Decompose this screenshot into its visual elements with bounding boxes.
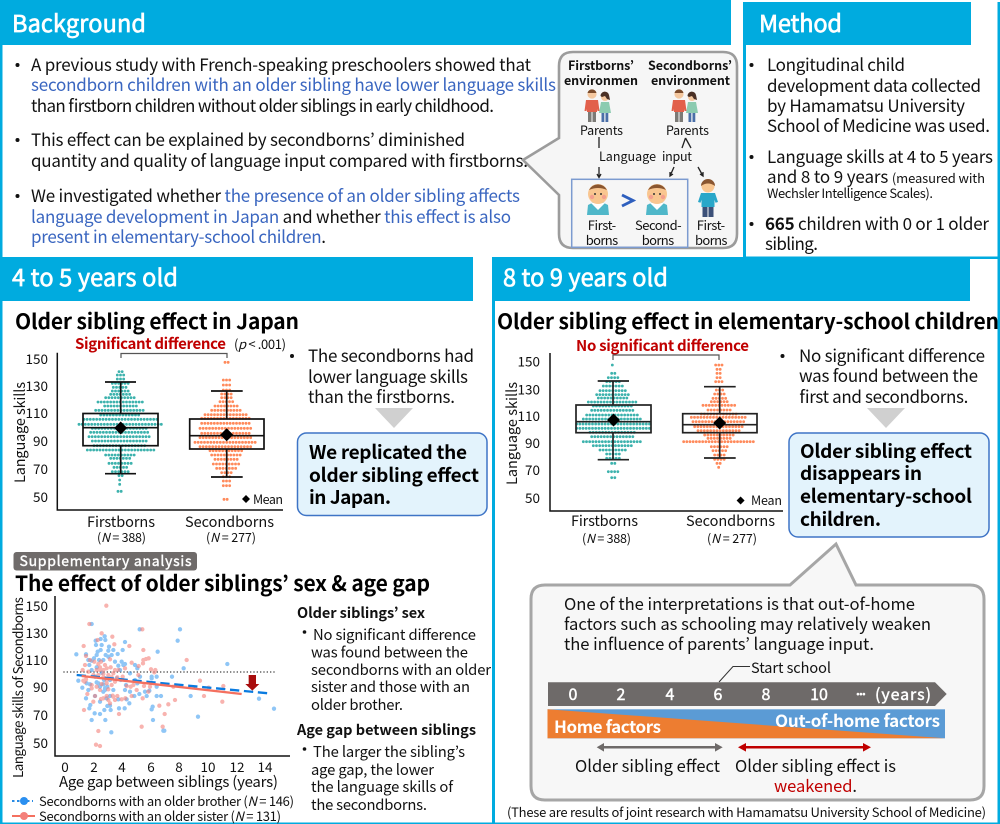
icon: baby secondborn — [646, 184, 668, 215]
text block: older siblings' sex — [297, 602, 491, 715]
diagram child labels: borns — [642, 230, 674, 249]
text block: finding 4 to 5 years — [290, 342, 474, 408]
icon: parents of secondborns — [672, 89, 698, 122]
diagram labels — [564, 55, 732, 165]
significance label: Significant difference — [75, 333, 226, 354]
x axis labels: (N = 277) — [206, 527, 256, 546]
arrow: age timeline: 6 — [714, 681, 723, 705]
arrow: older sibling effect period: Older sibling effect — [575, 753, 720, 777]
callout: conclusion 8 to 9 years — [789, 433, 989, 537]
panel: background — [0, 0, 737, 249]
y axis labels: 50 — [525, 487, 540, 507]
diagram labels: Language — [599, 146, 656, 165]
arrow: weakened period — [735, 743, 896, 797]
x axis labels: 6 — [147, 756, 155, 776]
label: start school: Start school — [751, 657, 831, 678]
text block: method bullets: and 8 to 9 years (measured with — [767, 163, 985, 188]
text block: method bullets: development data collected — [767, 72, 981, 97]
diagram child labels: Second- — [635, 215, 682, 234]
text block: age gap between siblings: Age gap between siblings — [296, 719, 476, 740]
diagram labels: Parents — [666, 120, 709, 139]
y axis labels — [7, 595, 48, 778]
arrow: age timeline: 10 — [810, 681, 828, 705]
diagram labels: Firstborns’ — [568, 55, 634, 74]
significance label: (p < .001) — [234, 334, 286, 353]
x axis labels: 12 — [230, 756, 244, 776]
x axis labels: 14 — [258, 756, 273, 776]
diagram labels: Parents — [580, 120, 623, 139]
text block: interpretation: the influence of parents’ language input. — [564, 631, 874, 655]
heading: background: Background — [12, 5, 146, 39]
text block: finding 4 to 5 years: than the firstborns. — [308, 383, 455, 408]
heading: background — [0, 0, 731, 45]
arrow: age timeline: 8 — [762, 681, 771, 705]
text block: age gap between siblings: the secondborns. — [311, 794, 427, 815]
text block: method bullets: Longitudinal child — [767, 51, 905, 76]
diagram labels: Secondborns’ — [648, 55, 732, 74]
text block: finding 8 to 9 years: No significant difference — [799, 342, 985, 367]
x axis labels: (N = 388) — [97, 527, 146, 546]
arrow: age timeline — [548, 681, 947, 706]
text block: finding 8 to 9 years: first and secondborns. — [799, 383, 968, 408]
diagram child labels: First- — [697, 215, 725, 234]
x axis labels — [61, 756, 273, 776]
y axis labels: 110 — [518, 405, 540, 425]
diagram child labels — [586, 215, 728, 249]
y axis labels: Language skills — [9, 382, 30, 483]
x axis labels: 2 — [90, 756, 98, 776]
label: start school — [719, 657, 831, 682]
callout: conclusion 8 to 9 years: Older sibling effect — [800, 437, 972, 464]
arrow: age timeline: (years) — [875, 681, 931, 705]
footnote: (These are results of joint research with Hamamatsu University School of Medicine) — [507, 802, 986, 821]
icon: baby firstborn — [587, 184, 609, 215]
heading: method: Method — [759, 5, 842, 39]
callout: interpretation — [531, 544, 984, 800]
y axis labels: Language skills — [501, 382, 522, 485]
text block: age gap between siblings — [296, 719, 476, 815]
text block: interpretation: factors such as schooling may relatively weaken — [564, 611, 931, 635]
heading: supplementary: The effect of older siblings’ sex & age gap — [15, 568, 430, 598]
x axis labels: Firstborns — [87, 511, 155, 532]
x axis labels: 8 — [175, 756, 183, 776]
chart: box and dot plot 4 to 5 years — [9, 348, 283, 546]
text block: method bullets: sibling. — [765, 230, 818, 255]
chart title: Older sibling effect in elementary-school children — [497, 306, 999, 336]
y axis labels: 150 — [518, 350, 540, 370]
x axis labels: (N = 388) — [582, 528, 631, 547]
heading: 4 to 5 years old: 4 to 5 years old — [12, 259, 178, 293]
text block: older siblings' sex: No significant difference — [313, 624, 476, 645]
x axis labels: Firstborns — [571, 510, 638, 531]
y axis labels: 70 — [33, 458, 48, 478]
text block: background bullets: secondborn children with an older sibling have lower language skills — [31, 71, 556, 96]
text block: interpretation: One of the interpretations is that out-of-home — [564, 591, 915, 615]
chart title: Older sibling effect in Japan — [15, 306, 299, 336]
heading: 8 to 9 years old: 8 to 9 years old — [503, 259, 668, 293]
y axis labels: 150 — [26, 595, 48, 615]
text block: finding 8 to 9 years: was found between the — [799, 362, 978, 387]
text block: method bullets: Language skills at 4 to 5 years — [767, 143, 993, 168]
icon: older sibling firstborn — [698, 179, 718, 217]
x axis title: Age gap between siblings (years) — [59, 771, 278, 792]
heading: method — [743, 2, 971, 45]
legend: brother and sister: Secondborns with an older brother (N = 146) — [39, 791, 294, 810]
y axis labels — [501, 350, 540, 507]
legend: mean: Mean — [253, 489, 283, 508]
text block: method bullets — [750, 51, 993, 255]
y axis labels: 130 — [26, 375, 48, 395]
y axis labels: 50 — [33, 486, 48, 506]
x axis labels: 0 — [61, 756, 69, 776]
y axis labels: 90 — [33, 676, 48, 696]
x axis labels: (N = 277) — [707, 528, 757, 547]
arrow: down to conclusion — [375, 408, 413, 428]
bar: home vs out-of-home factors: Out-of-home factors — [775, 707, 940, 732]
diagram child labels: borns — [695, 230, 728, 249]
text block: older siblings' sex: secondborns with an older — [311, 659, 491, 680]
callout: conclusion 4 to 5 years: We replicated the — [309, 438, 467, 465]
icon: greater-than sign — [622, 195, 633, 206]
text block: background bullets: quantity and quality of language input compared with firstborns. — [31, 147, 528, 172]
text block: method bullets: by Hamamatsu University — [767, 92, 965, 117]
significance label — [75, 333, 286, 358]
diagram child labels: borns — [586, 230, 618, 249]
icon: parents of firstborns — [584, 89, 611, 122]
significance label: No significant difference — [576, 335, 749, 356]
panel: method — [743, 2, 993, 255]
text block: finding 4 to 5 years: lower language skills — [308, 363, 468, 388]
label: supplementary analysis: Supplementary analysis — [20, 551, 192, 571]
arrow: weakened period: Older sibling effect is — [735, 753, 896, 777]
text block: older siblings' sex: was found between the — [311, 642, 468, 662]
text block: background bullets: present in elementary-school children. — [31, 223, 326, 248]
y axis labels: 90 — [33, 430, 48, 450]
y axis labels: 50 — [33, 732, 48, 752]
y axis labels: 90 — [525, 432, 540, 452]
diagram child labels: First- — [588, 215, 616, 234]
text block: background bullets: We investigated whether the presence of an older sibling affects — [31, 182, 520, 207]
callout: conclusion 4 to 5 years: in Japan. — [309, 483, 391, 510]
bar: home vs out-of-home factors: Home factors — [554, 713, 661, 738]
y axis labels: 150 — [26, 348, 48, 368]
x axis labels: Secondborns — [185, 511, 274, 532]
text block: finding 8 to 9 years — [780, 342, 985, 408]
callout: conclusion 4 to 5 years — [298, 433, 487, 516]
x axis labels: 10 — [200, 756, 216, 776]
arrow: down to conclusion — [867, 408, 905, 428]
x axis labels — [571, 510, 775, 547]
arrows: language input — [597, 137, 703, 178]
text block: method bullets: Wechsler Intelligence Scales). — [767, 183, 933, 202]
callout: conclusion 8 to 9 years: elementary-school — [800, 482, 972, 509]
y axis labels: 130 — [26, 622, 48, 642]
bar: home vs out-of-home factors — [548, 707, 945, 738]
diagram labels: input — [662, 146, 692, 165]
diagram labels: environment — [651, 70, 731, 89]
y axis labels: 130 — [518, 378, 540, 398]
y axis labels: 110 — [26, 649, 48, 669]
arrow: age timeline: ··· — [854, 681, 868, 705]
text block: method bullets: 665 children with 0 or 1 older — [765, 210, 989, 235]
panel: 4 to 5 years old — [0, 257, 491, 824]
text block: age gap between siblings: The larger the sibling’s — [313, 741, 465, 762]
text block: older siblings' sex: older brother. — [311, 694, 403, 715]
legend: mean — [737, 490, 782, 509]
text block: background bullets: A previous study with French-speaking preschoolers showed that — [31, 51, 532, 76]
callout: conclusion 8 to 9 years: disappears in — [800, 459, 922, 486]
text block: older siblings' sex: Older siblings’ sex — [297, 602, 425, 623]
heading: 4 to 5 years old — [0, 257, 473, 301]
legend: brother and sister — [12, 791, 294, 824]
arrow: age timeline: 2 — [617, 681, 626, 705]
y axis labels: 70 — [33, 704, 48, 724]
text block: older siblings' sex: sister and those with an — [311, 676, 470, 697]
y axis labels: Language skills of Secondborns — [7, 597, 27, 778]
text block: background bullets: language development in Japan and whether this effect is also — [31, 203, 511, 228]
arrow: age timeline: 0 — [569, 681, 578, 705]
box: comparison of input — [572, 179, 688, 247]
callout: conclusion 8 to 9 years: children. — [800, 505, 881, 532]
x axis labels: Secondborns — [686, 510, 775, 531]
y axis labels: 70 — [525, 459, 540, 479]
text block: finding 4 to 5 years: The secondborns had — [308, 342, 474, 367]
text block: interpretation — [564, 591, 931, 655]
text block: age gap between siblings: the language skills of — [311, 776, 454, 797]
y axis labels: 110 — [26, 402, 48, 422]
x axis labels: 4 — [118, 756, 126, 776]
arrow: age timeline: 4 — [666, 681, 675, 705]
text block: background bullets: This effect can be explained by secondborns’ diminished — [31, 126, 465, 151]
x axis labels — [87, 511, 274, 546]
panel: 8 to 9 years old — [492, 257, 999, 821]
y axis labels — [9, 348, 48, 506]
chart: box and dot plot 8 to 9 years — [501, 350, 783, 547]
arrow: weakened period: weakened. — [774, 773, 857, 797]
chart: scatter of age gap — [7, 595, 294, 824]
heading: 8 to 9 years old — [492, 257, 970, 301]
diagram labels: environmen — [564, 70, 638, 89]
text block: method bullets: School of Medicine was used. — [767, 112, 990, 137]
callout: conclusion 4 to 5 years: older sibling effect — [309, 461, 479, 488]
text block: age gap between siblings: age gap, the lower — [311, 759, 434, 780]
arrow: older sibling effect period — [575, 743, 723, 777]
legend: mean: Mean — [751, 490, 782, 509]
text block: background bullets — [16, 51, 556, 248]
callout: language input diagram — [523, 52, 737, 249]
text block: background bullets: than firstborn children without older siblings in early childhood. — [31, 92, 494, 117]
